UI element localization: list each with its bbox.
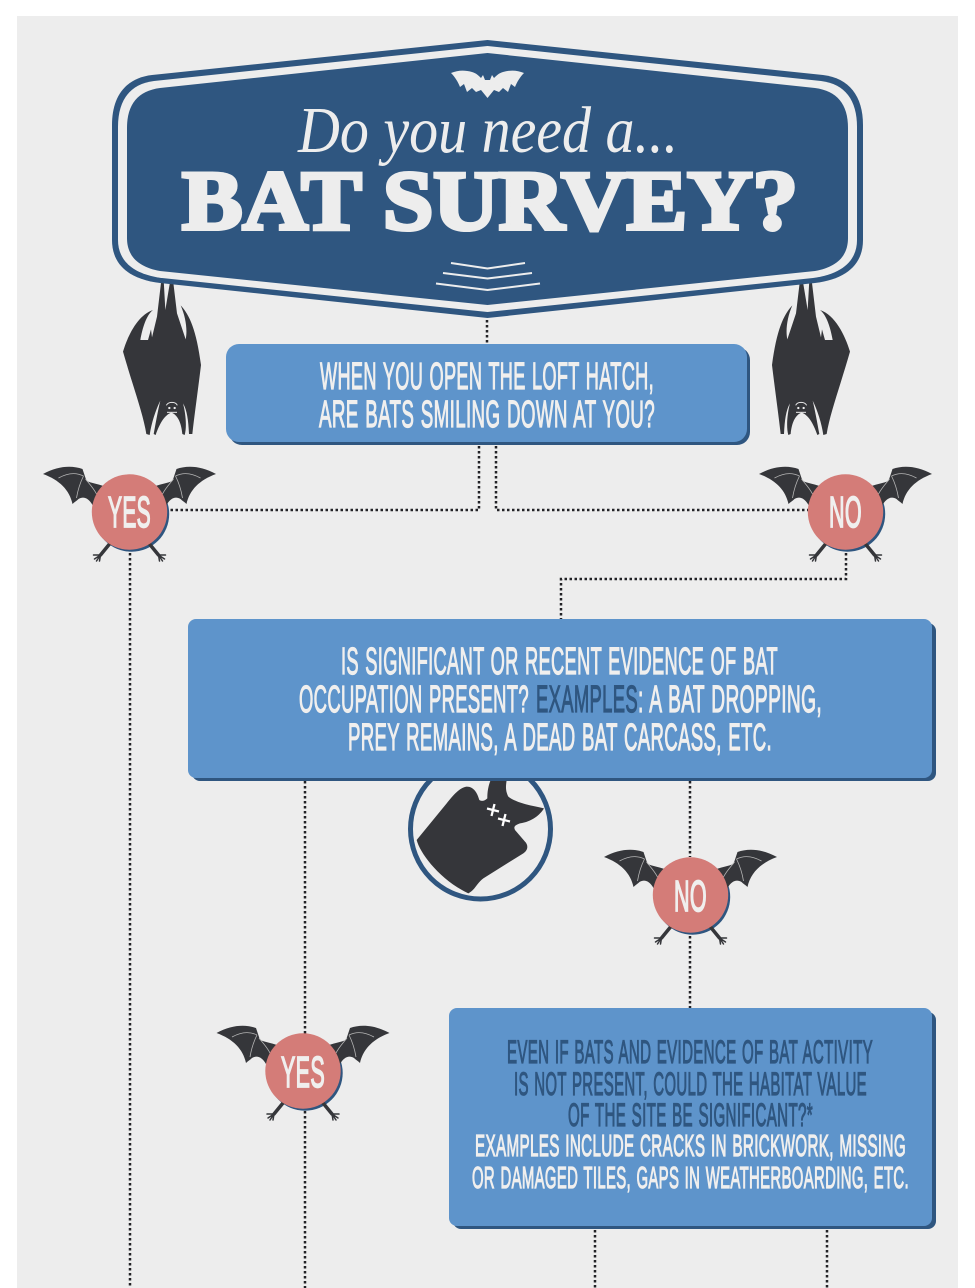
no answer bat centre: NO [674, 872, 707, 921]
no answer bat right: NO [829, 488, 862, 537]
no answer bat centre [604, 850, 777, 944]
icon: crossed eyes [487, 804, 510, 826]
yes answer bat left [43, 467, 216, 561]
question box 2: OCCUPATION PRESENT? [299, 679, 529, 721]
question box 3 [449, 1008, 936, 1229]
no answer bat right [759, 467, 932, 561]
title line: do you need a: Do you need a... [297, 94, 678, 167]
icon: small white bat [451, 71, 524, 98]
badge ring [410, 759, 550, 899]
title line: bat survey: BAT SURVEY? [182, 154, 798, 248]
yes answer bat centre: YES [281, 1048, 325, 1097]
icon: right hanging bat [772, 280, 850, 435]
dead bat badge [410, 759, 550, 899]
question box 2 [188, 619, 936, 781]
icon: dead bat [417, 780, 544, 893]
yes answer bat left: YES [108, 488, 151, 537]
question box 1 [226, 344, 750, 445]
question box 2: EXAMPLES [536, 679, 638, 721]
icon: chevrons [436, 263, 540, 290]
title plaque [112, 40, 863, 318]
yes answer bat centre [216, 1026, 390, 1120]
icon: left hanging bat [123, 280, 201, 435]
dotted flow connectors [130, 320, 846, 1288]
